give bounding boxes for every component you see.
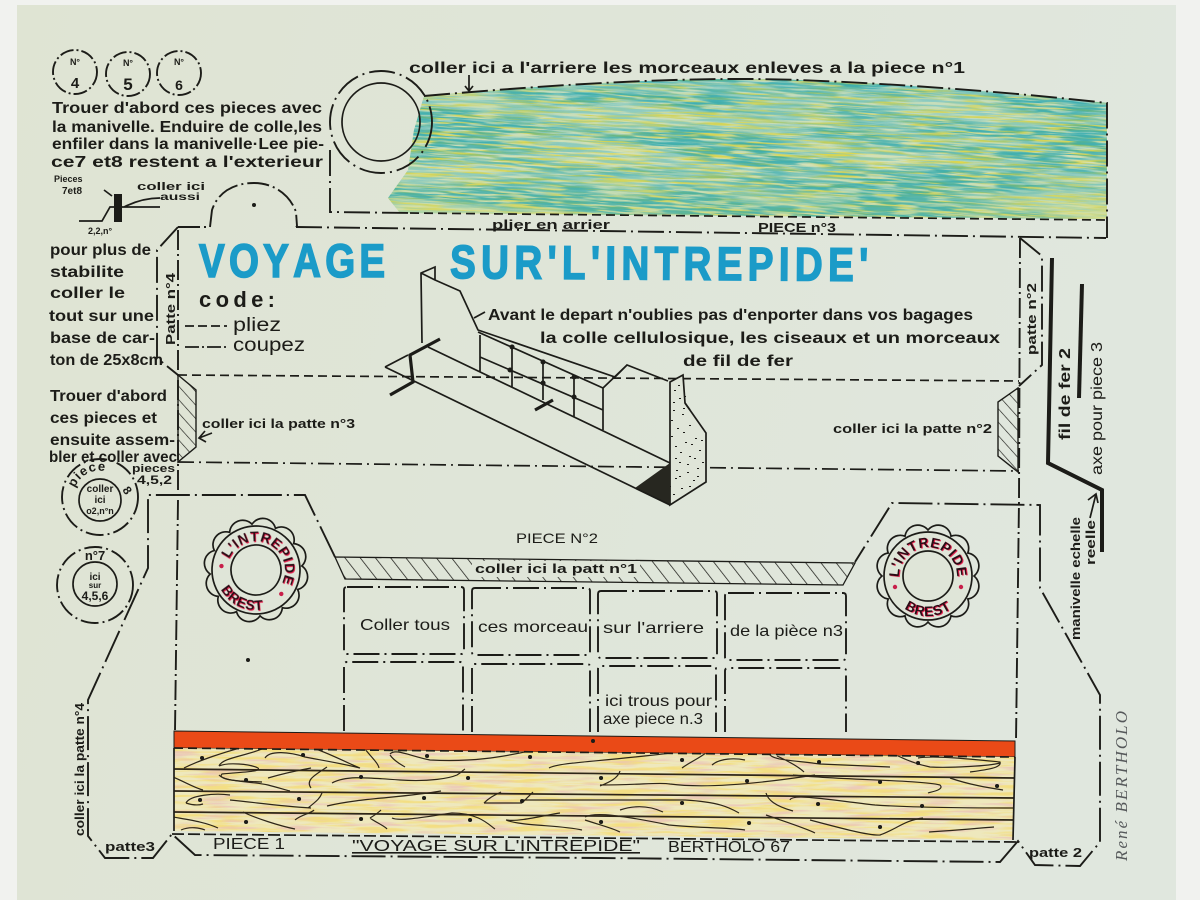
panel: wire pieces (1048, 258, 1106, 640)
hatched glue tab right (998, 388, 1018, 472)
label: fold back: plier en arrier (492, 217, 610, 232)
patte 2: patte 2 (1029, 845, 1082, 860)
left life ring: L'INTREPIDE (221, 531, 296, 586)
bottom labels (105, 836, 1082, 860)
panel: wood deck (170, 745, 1020, 845)
dark shaded corner (635, 463, 670, 505)
patte 3: patte3 (105, 839, 155, 854)
instructions: base: tout sur une (49, 308, 154, 325)
wood border lines (174, 748, 1015, 757)
instructions: crank: enfiler dans la manivelle·Lee pie- (52, 136, 324, 153)
disc piece 8: o2,n°n (86, 506, 114, 516)
panel: piece 3 sea band (296, 62, 1108, 239)
right life ring: L'INTREPIDE (889, 538, 968, 578)
instructions: crank (51, 100, 324, 171)
model name: "VOYAGE SUR L'INTREPIDE" (352, 838, 640, 855)
instructions: base (49, 242, 163, 369)
glue label right: coller ici la patte n°2 (833, 421, 992, 436)
disc piece 7: 4,5,6 (82, 589, 109, 603)
piece 3 outline (424, 79, 1107, 238)
box captions: ici trous pour (605, 693, 713, 710)
box captions: ces morceau (478, 619, 588, 636)
author stamp: BERTHOLO 67 (668, 839, 790, 856)
top row boxes (344, 587, 846, 660)
rotated label patte 4 glue: coller ici la patte n°4 (72, 702, 87, 836)
wire crank (1048, 258, 1102, 552)
crank detail sketch: 2,2,n° (88, 226, 113, 236)
reminder text: de fil de fer (683, 353, 793, 370)
crank detail sketch: 7et8 (62, 186, 82, 197)
disc piece 8: ici (94, 495, 106, 506)
instructions: crank: ce7 et8 restent a l'exterieur (51, 154, 323, 171)
disc piece 8: 8 (120, 484, 135, 497)
title (199, 235, 868, 292)
fold horizontals (178, 375, 1019, 381)
reminder text: Avant le depart n'oublies pas d'enporter dans vos bagages (488, 307, 973, 324)
reminder text (488, 307, 1000, 370)
instructions: assemble: ensuite assem- (50, 432, 175, 449)
label: glue here: coller ici a l'arriere les morceaux enleves a la piece n°1 (409, 60, 965, 77)
patte 2 tab (1019, 238, 1042, 386)
instructions: assemble: bler et coller avec (49, 449, 177, 466)
label real: reelle (1083, 520, 1098, 565)
crank detail sketch: Pieces (54, 174, 83, 184)
box captions: de la pièce n3 (730, 623, 843, 640)
box captions: sur l'arriere (603, 620, 704, 637)
ring at end of piece 3 (330, 71, 432, 173)
title: VOYAGE (199, 235, 385, 288)
instructions: crank: Trouer d'abord ces pieces avec (52, 100, 322, 117)
label: piece 3: PIECE n°3 (758, 220, 836, 235)
left life ring: BREST (221, 584, 264, 612)
left life ring (204, 518, 308, 622)
rivets (510, 347, 574, 397)
instructions: base: ton de 25x8cm (50, 352, 163, 369)
crank bars on model (390, 339, 553, 410)
disc piece 7: n°7 (85, 548, 105, 563)
crank detail sketch: aussi (160, 192, 200, 203)
disc piece 8: piece (69, 464, 105, 488)
panel: piece 2 lower body (72, 494, 1101, 867)
instructions: base: stabilite (50, 264, 124, 281)
instructions: base: coller le (50, 285, 125, 302)
instructions: assemble: ces pieces et (50, 410, 158, 427)
arrow glue left (199, 431, 212, 442)
rotated label patte 2: patte n°2 (1024, 283, 1039, 355)
disc 6: 6 (175, 77, 183, 93)
instructions: assemble: Trouer d'abord (50, 388, 167, 405)
wood grain (173, 748, 1018, 835)
box captions: axe piece n.3 (603, 711, 703, 728)
disc 6: N° (174, 57, 184, 67)
legend: code (185, 287, 305, 356)
grid of glue boxes (344, 587, 846, 732)
patte 4 tab (157, 227, 178, 375)
crank detail sketch: coller ici (137, 181, 205, 193)
glue label over strip (472, 561, 640, 577)
disc piece 7 (57, 547, 133, 623)
label crank scale: manivelle echelle (1068, 517, 1083, 640)
piece 1: PIECE 1 (213, 836, 285, 853)
disc piece 8: coller (87, 484, 113, 495)
axle wire (1079, 284, 1082, 398)
rotated label patte 4: Patte n°4 (163, 272, 178, 345)
instructions: assemble: pieces (132, 463, 175, 475)
red stripe (174, 731, 1015, 757)
disc 4 (53, 50, 97, 94)
box captions (360, 617, 843, 728)
label axle: axe pour piece 3 (1089, 342, 1106, 475)
legend: code: code: (199, 287, 275, 312)
disc piece 7: sur (89, 581, 101, 590)
glue label over strip: coller ici la patt n°1 (475, 561, 637, 576)
stippled end of model (670, 375, 706, 505)
panel: piece 2 upper body (157, 183, 1042, 741)
crank detail sketch (54, 174, 205, 236)
instructions: base: pour plus de (50, 242, 151, 259)
piece 2 label: PIECE N°2 (516, 530, 598, 546)
instructions: crank: la manivelle. Enduire de colle,les (52, 119, 322, 136)
disc piece 8 (61, 458, 139, 536)
panel: numbered discs and instructions (49, 49, 324, 624)
legend: code: pliez (233, 315, 281, 336)
fold verticals (175, 230, 178, 731)
legend: code: coupez (233, 335, 305, 356)
hole dot (246, 658, 250, 662)
reminder text: la colle cellulosique, les ciseaux et un morceaux (540, 330, 1000, 347)
right life ring: BREST (905, 600, 950, 618)
glue label left: coller ici la patte n°3 (202, 416, 355, 431)
arrow to glue edge (465, 75, 473, 91)
disc 6 (157, 51, 201, 95)
piece 3 base lines (330, 150, 410, 213)
label wire: fil de fer 2 (1057, 348, 1074, 440)
disc 5: 5 (123, 75, 133, 94)
box captions: Coller tous (360, 617, 450, 634)
wood dots (200, 755, 997, 827)
outer cut line (88, 495, 1100, 866)
disc 4: 4 (71, 75, 80, 92)
disc 5: N° (123, 58, 133, 68)
disc piece 7: ici (89, 572, 101, 583)
crayon sea fill (388, 79, 1107, 219)
arrow crank (1088, 494, 1098, 518)
disc 5 (106, 52, 150, 96)
dome tab (178, 183, 297, 227)
instructions: assemble (49, 388, 177, 487)
right life ring (876, 524, 980, 628)
instructions: base: base de car- (50, 330, 155, 347)
title: SUR'L'INTREPIDE' (450, 236, 868, 292)
isometric model sketch (385, 267, 706, 505)
hatched glue tab left (178, 375, 196, 462)
hatched glue strip (335, 557, 855, 585)
disc 4: N° (70, 57, 80, 67)
instructions: assemble: 4,5,2 (137, 473, 172, 487)
author signature: René BERTHOLO (1112, 711, 1131, 862)
bottom row boxes (344, 662, 846, 732)
model outline (385, 267, 690, 505)
wood base colour (170, 745, 1020, 845)
